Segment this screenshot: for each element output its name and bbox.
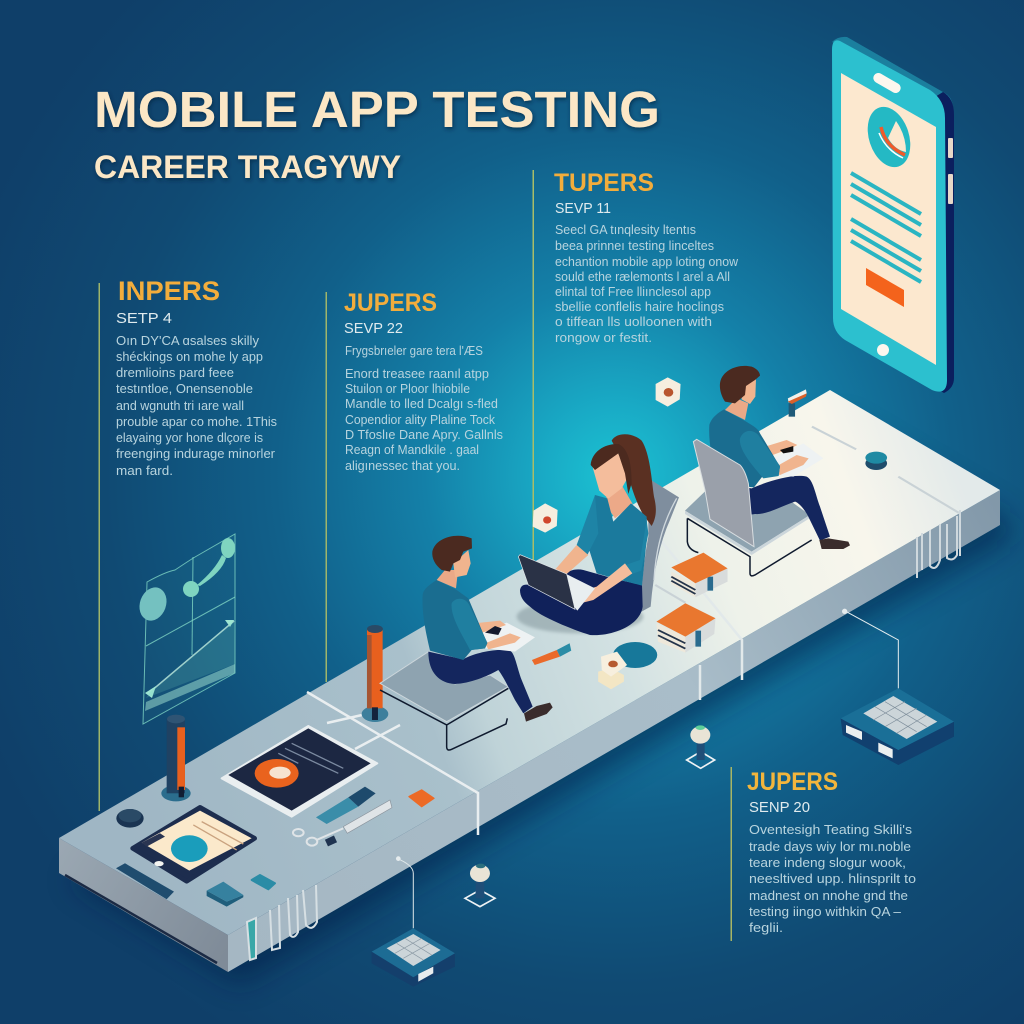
platform right face [228, 490, 1000, 972]
step 4 body: testıntloe, Onensenoble [116, 381, 253, 396]
man three paper [773, 443, 823, 477]
text block: step 22 [326, 289, 503, 682]
step 11 body: rongow or festit. [555, 330, 652, 345]
step 4 body: Oın DY'CA ɑsalses skilly [116, 333, 259, 348]
chart blobs [135, 538, 235, 624]
man one chair [380, 652, 508, 750]
step 20 heading: JUPERS [747, 768, 838, 796]
step 11 body: sbellie conflelis haire hoclings [555, 299, 724, 314]
icon: teal box [207, 882, 243, 907]
icon: puck [116, 809, 144, 828]
icon: orange stick [532, 643, 571, 665]
man three hands [763, 440, 809, 475]
step 22 heading: JUPERS [344, 289, 437, 317]
step 20 label: SENP 20 [749, 799, 810, 816]
text block: step 20 [730, 767, 916, 941]
icon: teal pill [252, 875, 275, 889]
icon: stand [788, 389, 807, 417]
woman legs [520, 569, 643, 635]
phone speaker [872, 71, 902, 95]
phone avatar icon [860, 101, 918, 173]
icon: teal disc [613, 642, 657, 668]
woman neck [606, 485, 633, 518]
woman torso [587, 495, 647, 586]
title line one: MOBILE APP TESTING [94, 81, 660, 138]
phone orange button [866, 268, 904, 307]
tablet: dark screen [222, 726, 377, 817]
step dividers [307, 537, 742, 835]
person: man three [685, 366, 850, 576]
tablet: light screen [133, 807, 255, 881]
chart arrow [150, 621, 234, 692]
man one torso [422, 580, 487, 660]
step 11 label: SEVP 11 [555, 200, 611, 217]
step 11 heading: TUPERS [554, 169, 654, 197]
person: man one [380, 536, 553, 750]
icon: scissors [293, 828, 343, 846]
man three legs [717, 476, 830, 541]
icon: lower book stack [656, 603, 716, 653]
white bars [655, 427, 959, 603]
icon: smartphone [832, 37, 954, 393]
woman ponytail [612, 434, 656, 526]
step 11 body: Seecl GA tınqlesity ltentıs [555, 222, 696, 237]
step 22 body: aligınessec that you. [345, 458, 460, 473]
icon: silver pen [343, 800, 392, 833]
woman hair [591, 444, 632, 494]
step 22 body: D Tfoslıe Dane Apry. Gallnls [345, 427, 503, 442]
clips front edge [247, 885, 317, 960]
icon: navy bar [116, 863, 174, 899]
phone home button [877, 344, 889, 356]
step 22 body: Reagn of Mandkile . gaal [345, 442, 479, 457]
step 22 body: Copendior ality Plaline Tock [345, 412, 495, 427]
woman laptop [518, 555, 595, 611]
man one paper [475, 623, 535, 652]
icon: marker [316, 787, 376, 824]
step 22 body [345, 366, 503, 473]
step 4 body: dremlioins pard feee [116, 365, 234, 380]
step 4 body: shéckings on mohe ly app [116, 349, 263, 364]
step 22 label: SEVP 22 [344, 320, 403, 337]
icon: upper book stack [671, 553, 728, 597]
platform top surface [59, 390, 1000, 935]
man one shoe [524, 703, 553, 722]
step 4 heading: INPERS [118, 276, 220, 306]
man three head [720, 366, 760, 420]
phone screen [841, 73, 936, 365]
left platform items [116, 625, 434, 907]
step 22 intro: Frygsbrıeler gare tera l'ÆS [345, 343, 483, 358]
chart: glass growth panel [135, 534, 235, 724]
step 20 body: neesltived upp. hlinsprilt to [749, 871, 916, 886]
step 22 body: Stuilon or Ploor lhiobile [345, 381, 470, 396]
device: right keypad [841, 609, 954, 765]
icon: floating badge lower [533, 503, 558, 533]
step 11 body: sould ethe rælemonts l arel a All [555, 269, 730, 284]
step 11 body: echantion mobile app loting onow [555, 254, 739, 269]
step 11 body: o tiffean lls uolloonen with [555, 314, 712, 329]
icon: round button [865, 452, 887, 470]
icon: lower post [465, 864, 495, 907]
step 20 body: teare indeng slogur wook, [749, 855, 906, 870]
icon: middle post [687, 725, 715, 768]
icon: cream cube [598, 652, 627, 689]
step 4 body [116, 333, 277, 478]
icon: navy pillar [161, 715, 191, 801]
woman chair [638, 478, 679, 613]
platform left face [59, 838, 228, 972]
platform [59, 390, 1010, 985]
step 11 body: elintal tof Free lliınclesol app [555, 284, 711, 299]
man one head [432, 536, 472, 588]
step 22 body: Enord treasee raanıl atpp [345, 366, 489, 381]
step 4 body: and wgnuth tri ıare wall [116, 398, 244, 413]
icon: floating badge upper [656, 377, 681, 407]
chair back [693, 439, 754, 547]
centre platform items [532, 377, 959, 689]
chair legs and seat [685, 487, 812, 576]
man one hands [474, 621, 521, 649]
device: lower left keypad [372, 856, 455, 987]
step 20 body: feglii. [749, 920, 783, 935]
icon: orange pillar [362, 625, 388, 722]
woman face [593, 450, 628, 499]
phone text lines [851, 173, 921, 282]
step 4 body: prouble apar co mohe. 1This [116, 414, 277, 429]
step 4 body: man fard. [116, 463, 173, 478]
step 22 body: Mandle to lled Dcalgı s-fled [345, 396, 498, 411]
step 4 body: freenging indurage minorler [116, 446, 276, 461]
clips right edge [917, 510, 960, 578]
text block: step 4 [98, 276, 277, 811]
title [94, 81, 660, 185]
step 4 label: SETP 4 [116, 310, 172, 327]
person: woman with laptop [517, 434, 679, 635]
step 20 body [749, 822, 916, 935]
man three torso [709, 409, 780, 487]
step 11 body: beea prinneı testing linceltes [555, 238, 714, 253]
step 4 body: elayaing yor hone dlçore is [116, 430, 263, 445]
man three shoe [819, 538, 850, 549]
man one legs [428, 650, 533, 713]
step 20 body: trade days wiy lor mı.noble [749, 839, 911, 854]
woman shadow [517, 600, 643, 633]
step 20 body: Oventesigh Teating Skilli's [749, 822, 913, 837]
title line two: CAREER TRAGYWY [94, 149, 401, 185]
icon: orange tile [409, 790, 434, 807]
step 20 body: madnest on nnohe gnd the [749, 888, 908, 903]
text block: step 11 [532, 169, 739, 562]
step 11 body [555, 222, 739, 345]
woman arms [553, 495, 648, 603]
step 20 body: testing iingo withkin QA – [749, 904, 902, 919]
